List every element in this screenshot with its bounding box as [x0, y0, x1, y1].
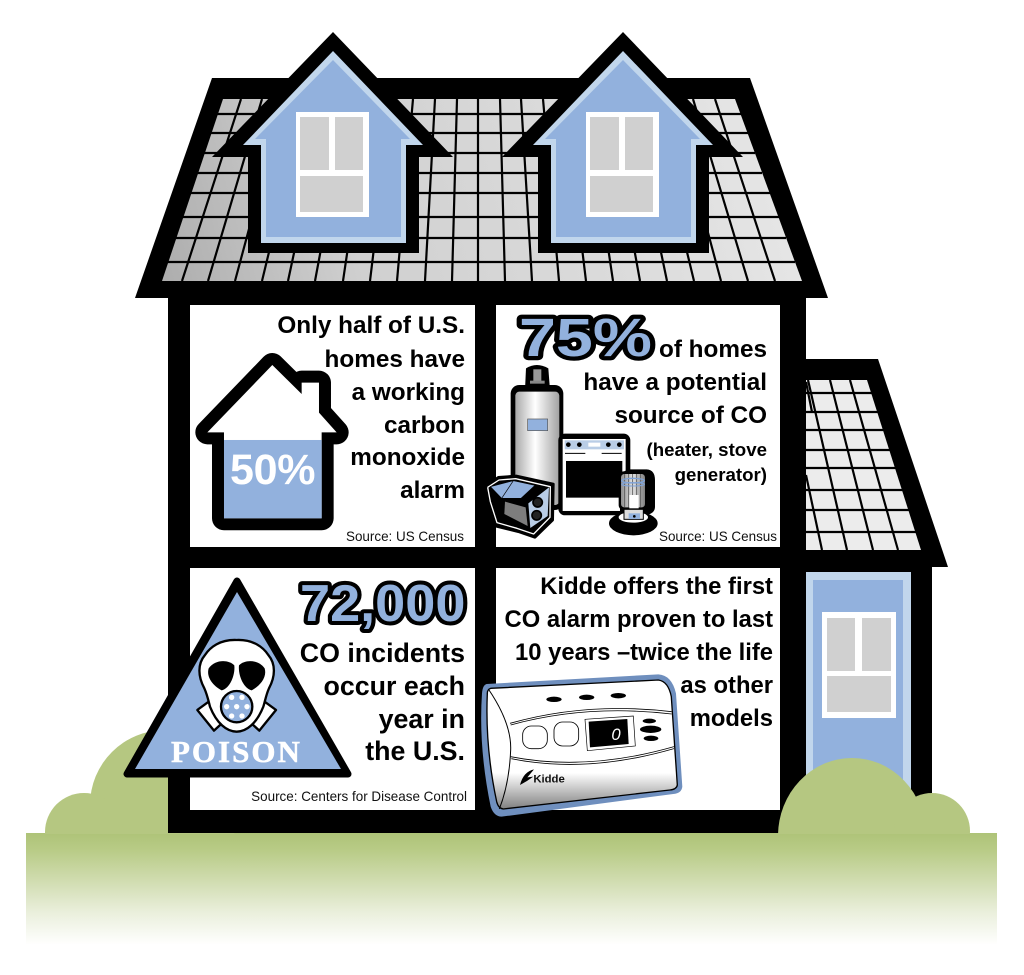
icon: house 50 percent — [207, 365, 337, 518]
illustration: CO alarm — [481, 674, 682, 817]
ground — [26, 833, 997, 945]
text: CO incidents — [300, 638, 465, 766]
text: of homes — [583, 336, 767, 485]
text: only half: monoxide — [350, 444, 465, 471]
door window — [822, 612, 896, 718]
bush: left — [45, 732, 234, 834]
side roof — [800, 359, 948, 567]
source: Source: Centers for Disease Control — [251, 789, 467, 804]
icon: gas mask — [197, 640, 276, 732]
text: Kidde offers: 10 years –twice the life — [515, 639, 773, 666]
house wall — [168, 296, 806, 833]
source: Source: US Census — [659, 529, 777, 544]
text: only half: homes have — [325, 346, 465, 373]
stove — [558, 434, 630, 515]
text: CO incidents: occur each — [324, 671, 465, 701]
text: Kidde offers: as other — [680, 672, 773, 699]
alarm display digit: 0 — [611, 725, 621, 744]
text: only half: a working — [352, 379, 465, 406]
dormer: right — [502, 32, 743, 253]
generator — [485, 476, 553, 537]
panel: incidents — [190, 568, 475, 810]
panel: Kidde alarm — [481, 568, 780, 817]
text: CO incidents: the U.S. — [365, 736, 465, 766]
dormer window — [296, 112, 369, 217]
alarm logo: Kidde — [533, 774, 565, 786]
icon: poison triangle — [127, 581, 348, 774]
source: Source: US Census — [346, 529, 464, 544]
text: of homes: (heater, stove — [647, 439, 767, 460]
text: Kidde offers — [505, 573, 773, 732]
text: only half: alarm — [400, 477, 465, 504]
illustration: appliances — [485, 365, 658, 537]
text: CO incidents: CO incidents — [300, 638, 465, 668]
dormer: left — [212, 32, 453, 253]
main roof — [135, 78, 828, 298]
stat: 72,000: 72,000 — [300, 575, 465, 633]
panel: potential sources — [485, 305, 780, 547]
text: Kidde offers: CO alarm proven to last — [505, 606, 773, 633]
text: Kidde offers: Kidde offers the first — [540, 573, 773, 600]
bush: right — [778, 758, 970, 834]
text: of homes: have a potential — [583, 369, 767, 396]
kerosene heater — [609, 469, 658, 535]
text: Kidde offers: models — [690, 705, 773, 732]
text: of homes: of homes — [659, 336, 767, 363]
text: only half — [277, 312, 465, 504]
text: CO incidents: year in — [379, 704, 465, 734]
stat: 75 percent: 75% — [519, 307, 652, 368]
icon: house 50 percent: 50% — [230, 446, 315, 494]
text: only half: Only half of U.S. — [277, 312, 465, 339]
dormer window — [586, 112, 659, 217]
label: poison: POISON — [171, 734, 302, 769]
water heater — [511, 365, 563, 510]
side wing wall with door — [800, 567, 932, 833]
text: of homes: source of CO — [614, 402, 767, 429]
panel: half of homes — [190, 305, 475, 547]
text: of homes: generator) — [675, 464, 767, 485]
text: only half: carbon — [384, 412, 465, 439]
